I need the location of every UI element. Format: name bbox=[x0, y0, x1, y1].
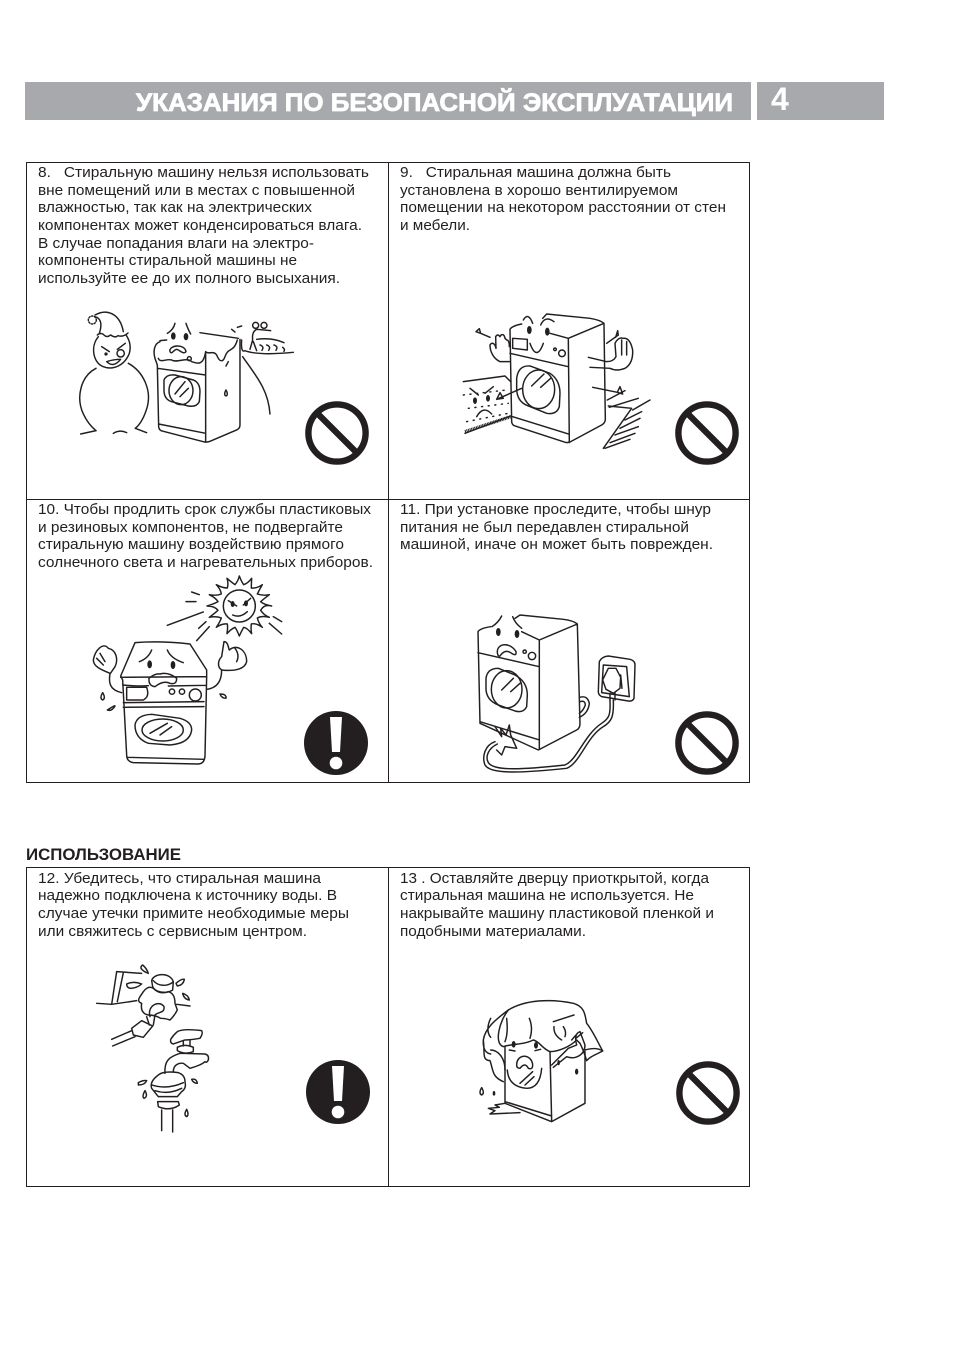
text: item 12: 12. Убедитесь, что стиральная машина bbox=[38, 871, 322, 887]
text: item 8: влажностью, так как на электрических bbox=[38, 200, 313, 216]
text: item 10: 10. Чтобы продлить срок службы пластиковых bbox=[38, 502, 372, 518]
text: item 12: надежно подключена к источнику воды. В bbox=[38, 888, 337, 904]
icon: prohibition sign bbox=[679, 1064, 737, 1122]
text: item 12 bbox=[38, 871, 349, 940]
text: item 11: машиной, иначе он может быть поврежден. bbox=[400, 537, 713, 553]
text: item 13: 13 . Оставляйте дверцу приоткрытой, когда bbox=[400, 871, 710, 887]
text: item 8: 8. Стиральную машину нельзя использовать bbox=[38, 165, 369, 181]
text: item 10: солнечного света и нагревательных приборов. bbox=[38, 555, 373, 571]
illustration: snowman and wet washing machine bbox=[80, 312, 293, 442]
text: item 8 bbox=[38, 165, 369, 287]
text: item 11 bbox=[400, 502, 713, 553]
illustration: machine covered with film bbox=[480, 1001, 603, 1122]
panel: item 12 bbox=[26, 868, 388, 1186]
icon: warning sign bbox=[306, 1060, 370, 1124]
text: item 9: помещении на некотором расстоянии от стен bbox=[400, 200, 726, 216]
illustration: machine away from walls bbox=[463, 314, 650, 448]
text: item 13 bbox=[400, 871, 714, 940]
section heading: ИСПОЛЬЗОВАНИЕ bbox=[26, 846, 181, 864]
text: item 8: используйте ее до их полного высыхания. bbox=[38, 271, 340, 287]
header banner bbox=[25, 82, 751, 120]
text: item 13: стиральная машина не используется. Не bbox=[400, 888, 694, 904]
text: item 9: установлена в хорошо вентилируемом bbox=[400, 183, 678, 199]
text: item 13: накрывайте машину пластиковой пленкой и bbox=[400, 906, 714, 922]
text: item 11: 11. При установке проследите, чтобы шнур bbox=[400, 502, 711, 518]
text: item 11: питания не был передавлен стиральной bbox=[400, 520, 689, 536]
panel: item 11 bbox=[388, 500, 750, 782]
text: item 12: случае утечки примите необходимые меры bbox=[38, 906, 349, 922]
text: item 8: вне помещений или в местах с повышенной bbox=[38, 183, 355, 199]
panel: item 8 bbox=[26, 162, 388, 500]
icon: prohibition sign bbox=[678, 404, 736, 462]
text: item 13: подобными материалами. bbox=[400, 924, 586, 940]
text: item 8: компоненты стиральной машины не bbox=[38, 253, 297, 269]
page number bbox=[757, 81, 884, 120]
text: item 8: В случае попадания влаги на электро- bbox=[38, 236, 314, 252]
panel: item 9 bbox=[388, 162, 750, 500]
page number: 4 bbox=[771, 81, 789, 117]
text: item 9 bbox=[400, 165, 726, 234]
icon: prohibition sign bbox=[678, 714, 736, 772]
illustration: crushed power cord bbox=[478, 615, 635, 772]
icon: warning sign bbox=[304, 711, 368, 775]
text: item 10: стиральную машину воздействию прямого bbox=[38, 537, 344, 553]
icon: prohibition sign bbox=[308, 404, 366, 462]
text: item 10 bbox=[38, 502, 373, 571]
text: item 8: компонентах может конденсироваться влага. bbox=[38, 218, 362, 234]
title: УКАЗАНИЯ ПО БЕЗОПАСНОЙ ЭКСПЛУАТАЦИИ bbox=[136, 87, 733, 117]
panel: item 13 bbox=[388, 868, 750, 1186]
panel: item 10 bbox=[26, 500, 388, 782]
text: item 10: и резиновых компонентов, не подвергайте bbox=[38, 520, 343, 536]
text: item 12: или свяжитесь с сервисным центром. bbox=[38, 924, 307, 940]
text: item 9: и мебели. bbox=[400, 218, 470, 234]
illustration: machine under the sun bbox=[93, 576, 282, 764]
illustration: water connections and leaks bbox=[97, 965, 209, 1132]
text: item 9: 9. Стиральная машина должна быть bbox=[400, 165, 671, 181]
